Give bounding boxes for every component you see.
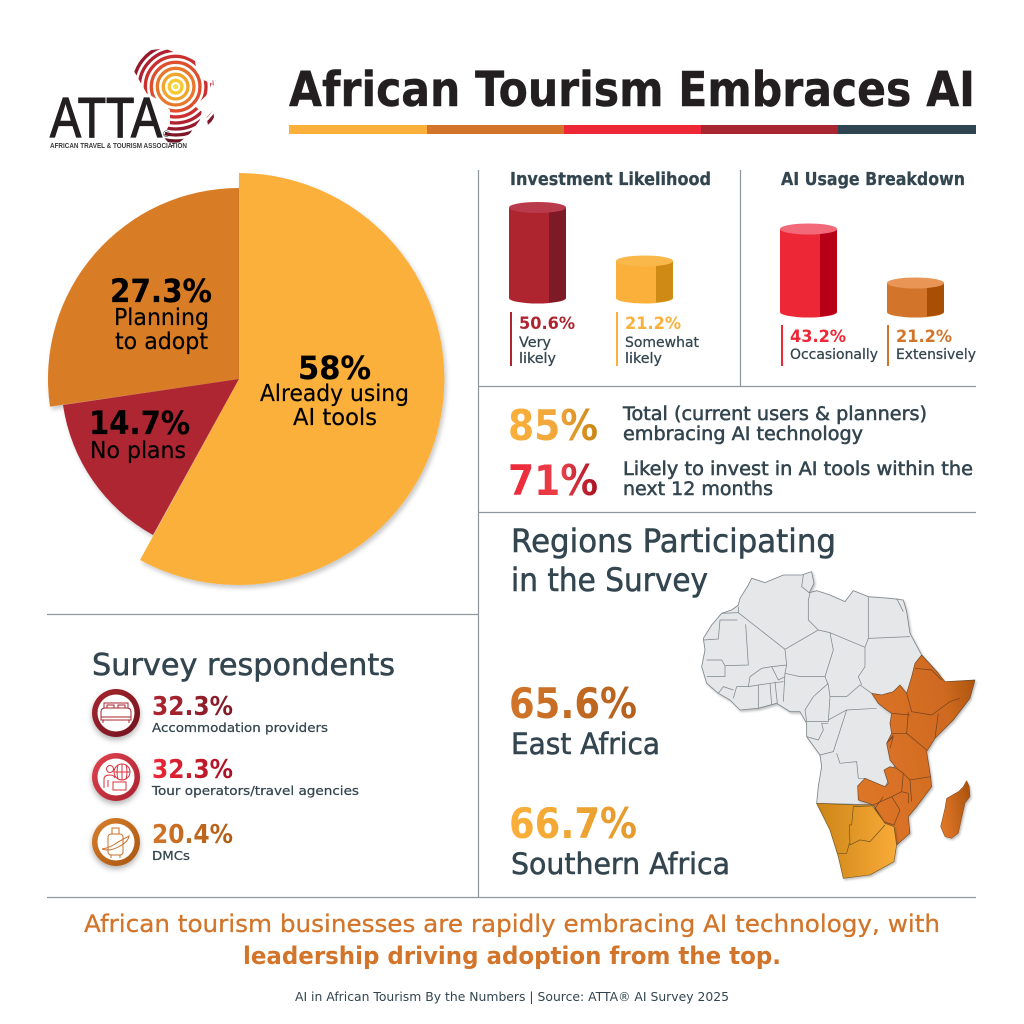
pie label: 14.7%: 14.7%	[89, 404, 190, 442]
pie slice: no plans	[63, 379, 239, 535]
stat: 71% invest: 71%	[508, 456, 598, 505]
stat: Southern Africa	[509, 799, 730, 881]
pie label: 14.7%	[89, 404, 190, 464]
label: occasionally: 43.2%	[790, 327, 846, 347]
footer takeaway: African tourism businesses are rapidly embracing AI technology, with	[84, 910, 940, 938]
panel: AI usage breakdown	[780, 170, 976, 366]
pie label: 14.7%: No plans	[90, 438, 186, 464]
stat: East Africa	[509, 679, 660, 761]
map: Madagascar	[941, 781, 970, 838]
map: east Africa	[858, 655, 975, 845]
map of Africa	[702, 572, 975, 878]
stat: tour operators	[151, 755, 359, 798]
pie label: 58%: 58%	[298, 349, 371, 387]
pie label: 58%: Already using	[260, 381, 409, 407]
stat: 85% embracing: embracing AI technology	[623, 424, 863, 445]
pie label: 58%	[260, 349, 409, 431]
pie label: 58%: AI tools	[293, 405, 377, 431]
label: very likely: likely	[519, 351, 556, 367]
stat: Southern Africa: Southern Africa	[511, 847, 730, 881]
stat: Southern Africa: 66.7%	[509, 799, 637, 848]
label: extensively	[887, 325, 976, 366]
footer takeaway	[84, 910, 940, 970]
label: very likely: Very	[519, 335, 551, 351]
stat: accommodation providers: Accommodation providers	[152, 720, 328, 735]
stat: 71% invest	[508, 456, 973, 505]
stat: DMCs	[152, 820, 233, 863]
panel: investment likelihood	[509, 170, 711, 367]
label: occasionally	[781, 325, 878, 366]
heading: AI Usage Breakdown	[781, 170, 965, 190]
label: somewhat likely: 21.2%	[625, 314, 681, 334]
pie label: 27.3%: 27.3%	[110, 272, 212, 310]
label: somewhat likely: likely	[625, 351, 662, 367]
stat: East Africa: East Africa	[511, 727, 660, 761]
stat: 85% embracing: 85%	[508, 401, 598, 450]
map: grey countries	[702, 572, 938, 805]
label: occasionally: Occasionally	[790, 347, 878, 363]
cylinder: somewhat likely	[616, 256, 673, 304]
map: southern Africa	[817, 803, 897, 878]
pie slice: already using	[140, 173, 444, 585]
stat: 71% invest: next 12 months	[623, 479, 773, 500]
logo wordmark: ATTA	[50, 86, 162, 150]
title colour bar	[289, 125, 976, 134]
panel: regions heading	[511, 522, 836, 599]
panel: regions heading: Regions Participating	[511, 522, 836, 560]
label: somewhat likely: Somewhat	[625, 335, 699, 351]
logo registered mark: ®	[163, 129, 170, 139]
icon: bed	[92, 689, 140, 737]
footer takeaway: leadership driving adoption from the top.	[243, 942, 781, 970]
cylinder: very likely	[509, 202, 566, 304]
heading: Survey respondents	[92, 648, 395, 683]
pie label: 27.3%: Planning	[114, 305, 209, 331]
stat: DMCs: DMCs	[152, 848, 190, 863]
pie label: 27.3%: to adopt	[115, 329, 208, 355]
stat: East Africa: 65.6%	[509, 679, 637, 728]
label: extensively: 21.2%	[896, 327, 952, 347]
logo tagline: AFRICAN TRAVEL & TOURISM ASSOCIATION	[50, 143, 187, 150]
cylinder: occasionally	[780, 224, 837, 318]
stat: tour operators: Tour operators/travel agencies	[151, 783, 359, 798]
panel: regions heading: in the Survey	[511, 561, 708, 599]
stat: 85% embracing: Total (current users & planners)	[622, 404, 927, 425]
panel: adoption pie chart	[48, 173, 444, 585]
label: extensively: Extensively	[896, 347, 976, 363]
label: very likely: 50.6%	[519, 314, 575, 334]
icon: luggage and plane	[92, 818, 140, 866]
logo: ATTA	[49, 48, 216, 148]
icon: tour operator	[92, 753, 140, 801]
source line: AI in African Tourism By the Numbers | Source: ATTA® AI Survey 2025	[295, 990, 729, 1004]
cylinder: extensively	[887, 278, 944, 318]
stat: accommodation providers: 32.3%	[152, 692, 233, 722]
label: very likely	[510, 312, 575, 367]
stat: 85% embracing	[508, 401, 927, 450]
panel: survey respondents	[92, 648, 395, 866]
stat: 71% invest: Likely to invest in AI tools within the	[623, 459, 973, 480]
pie label: 27.3%	[110, 272, 212, 355]
stat: tour operators: 32.3%	[152, 755, 233, 785]
heading: Investment Likelihood	[510, 170, 711, 190]
icon: concentric ring Africa	[134, 48, 216, 146]
stat: DMCs: 20.4%	[152, 820, 233, 850]
stat: accommodation providers	[152, 692, 328, 735]
pie slice: planning to adopt	[48, 188, 239, 407]
label: somewhat likely	[616, 312, 699, 367]
